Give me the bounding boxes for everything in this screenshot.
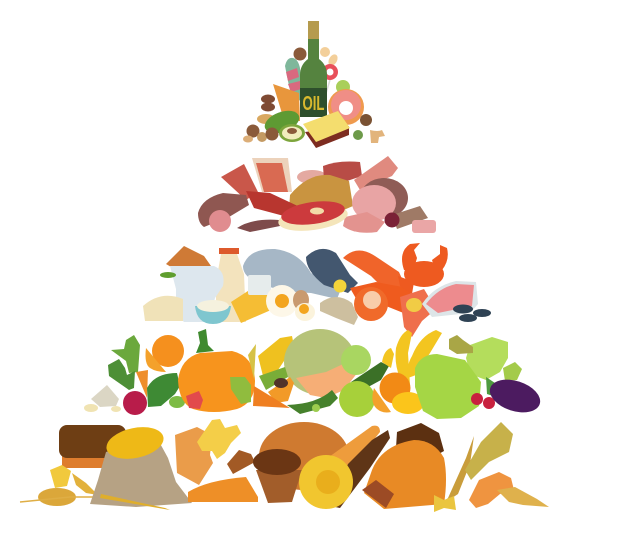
icon: cherries (471, 377, 498, 409)
icon: left wheat ear (20, 473, 100, 506)
tier 4: meat (198, 156, 436, 235)
icon: orange cheese behind jug (166, 246, 218, 298)
icon: shrimp plate (354, 287, 388, 321)
icon: leaf (230, 377, 251, 404)
icon: dark seeded bread (330, 430, 390, 508)
icon: bananas (382, 330, 442, 385)
icon: small pasta (50, 465, 71, 488)
icon: orange slice and orange (372, 372, 410, 412)
icon: oil bottle (300, 21, 327, 117)
icon: grain sack (90, 422, 192, 507)
tier 3: dairy and fish (143, 243, 491, 337)
icon: croissant (469, 472, 514, 508)
label text: OIL: OIL (302, 93, 324, 115)
icon: lettuce (466, 337, 508, 380)
icon: apple (341, 345, 371, 375)
icon: shrimp (343, 250, 407, 298)
icon: bacon strips (354, 156, 398, 190)
icon: peas (287, 390, 338, 414)
icon: broccoli (147, 373, 185, 408)
icon: left sausage (198, 193, 249, 227)
tier 2: fruit and vegetables (84, 329, 544, 419)
icon: pizza slice (273, 84, 300, 121)
icon: red fish fillet (400, 289, 436, 337)
icon: bow pasta (434, 495, 456, 512)
icon: tall wheat (434, 422, 513, 510)
icon: dark loaf (396, 423, 444, 461)
icon: pink round (209, 210, 231, 232)
icon: small carrot (136, 370, 148, 398)
icon: papaya (259, 367, 294, 403)
icon: garlic (84, 385, 121, 412)
icon: muffin (253, 449, 302, 503)
icon: lollipop (322, 64, 350, 100)
icon: mussels (453, 304, 491, 322)
icon: carrot (253, 386, 290, 408)
icon: ice pop (285, 58, 302, 106)
icon: beef joint (323, 162, 362, 182)
tier 5: oils, fats and sweets (243, 21, 385, 148)
icon: right wheat ear (497, 487, 549, 507)
icon: salami (384, 206, 428, 229)
icon: lemon (392, 392, 424, 414)
icon: leaf (160, 272, 176, 278)
icon: lime (339, 381, 375, 417)
icon: large bread (364, 440, 446, 509)
icon: toast (175, 427, 213, 485)
icon: pink sausage slices (297, 170, 327, 184)
icon: cabbage (415, 354, 481, 419)
icon: big grey fish (243, 249, 341, 299)
icon: red meat (246, 191, 302, 216)
icon: orange slice (146, 348, 166, 372)
icon: crab (398, 243, 448, 294)
icon: lobster (350, 282, 420, 320)
icon: milk jug (170, 266, 224, 322)
icon: milk bottle (216, 248, 246, 322)
icon: orange (152, 335, 184, 367)
icon: peach candies (320, 47, 339, 67)
icon: fried eggs (266, 285, 315, 321)
icon: ham (352, 178, 408, 221)
icon: pink piece (412, 220, 436, 233)
icon: nuts left (243, 124, 278, 142)
icon: bread cut end (362, 480, 394, 508)
icon: loaf (59, 425, 126, 468)
icon: ham slice (343, 212, 385, 233)
icon: cheese wedge (231, 289, 271, 323)
icon: cucumber (351, 362, 389, 392)
icon: mushrooms (320, 297, 358, 325)
icon: lemon wedge (406, 298, 422, 312)
icon: eggplant (486, 374, 544, 418)
icon: chocolate pastry (227, 450, 255, 474)
icon: pasta shapes (197, 419, 241, 459)
icon: leafy greens bottom (108, 359, 135, 390)
icon: pasta nest (299, 455, 353, 509)
icon: wheat stalk on sack (100, 494, 170, 510)
icon: baguette (322, 426, 380, 472)
icon: small dark sausage (237, 220, 280, 232)
icon: butter (303, 111, 350, 148)
icon: yoghurt bowl (195, 300, 231, 324)
icon: pecans (257, 94, 275, 124)
icon: raw ham cut (252, 158, 292, 192)
icon: leafy greens top (111, 335, 140, 373)
icon: raw meat cut (221, 164, 258, 200)
icon: beet (123, 391, 147, 415)
icon: steak (277, 198, 349, 235)
icon: donut (328, 89, 364, 125)
icon: leaf (503, 362, 522, 381)
icon: corn (248, 336, 294, 380)
icon: salmon steak (422, 281, 478, 317)
icon: pumpkin (178, 329, 255, 412)
icon: flat bread (188, 477, 258, 502)
icon: lemon slice on fish (334, 280, 346, 292)
icon: avocado (262, 106, 305, 142)
icon: melon (284, 329, 358, 398)
icon: white cheese block (143, 296, 183, 321)
tier 1: grains and bread (20, 419, 549, 512)
icon: strawberry (186, 391, 203, 409)
icon: lattice pie (259, 422, 349, 490)
icon: dark fish (306, 249, 358, 293)
icon: dark leaves (449, 335, 473, 354)
icon: roast chicken (289, 175, 353, 212)
icon: glass of milk (248, 275, 271, 295)
icon: nuts right (353, 114, 385, 143)
icon: top nut (294, 48, 306, 60)
